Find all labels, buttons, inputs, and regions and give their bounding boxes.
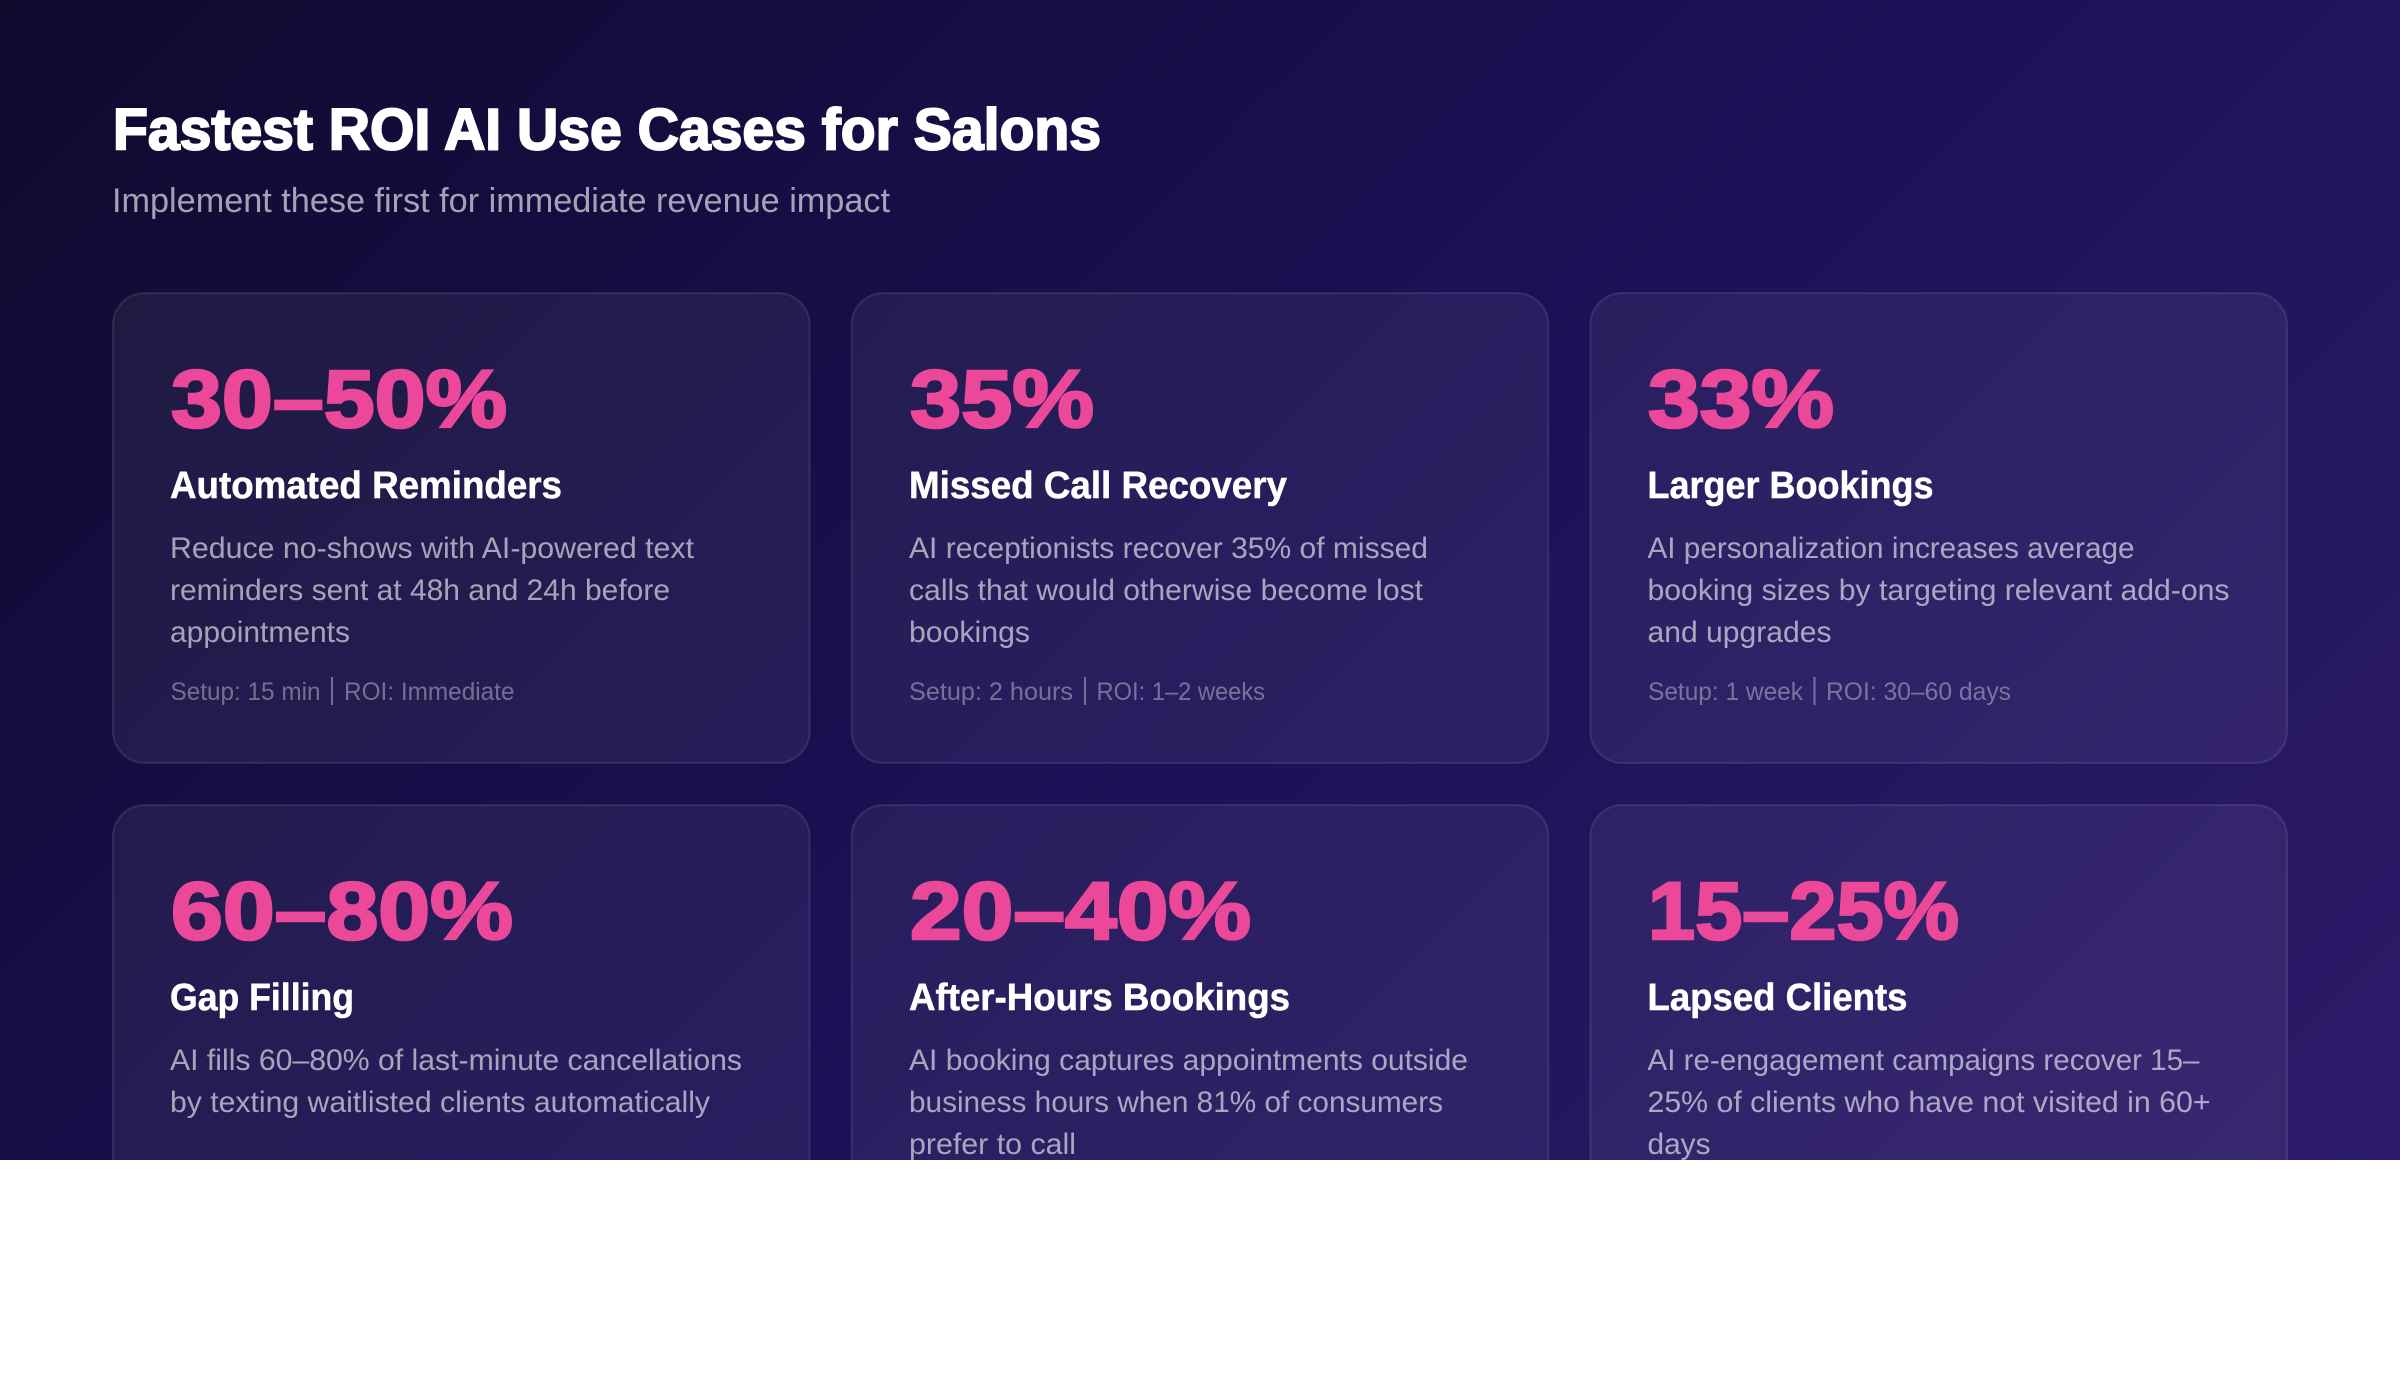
panel: automated reminders [113, 293, 810, 763]
stat: 15–25%: 15–25% [1648, 866, 1959, 957]
panel: after-hours bookings [852, 805, 1548, 1275]
description: calls that would otherwise become lost [909, 574, 1424, 607]
panel: missed call recovery [852, 293, 1548, 763]
stat: 35%: 35% [910, 354, 1094, 445]
description [909, 1044, 1468, 1161]
card heading: Gap Filling [170, 977, 354, 1019]
stat: 30–50%: 30–50% [171, 354, 507, 445]
description [1648, 532, 2230, 649]
card heading: Larger Bookings [1648, 465, 1934, 507]
description [909, 532, 1428, 649]
card heading: Lapsed Clients [1648, 977, 1908, 1019]
card heading: Missed Call Recovery [909, 465, 1287, 507]
card heading: After-Hours Bookings [909, 977, 1290, 1019]
setup and ROI [1648, 677, 2011, 706]
description: booking sizes by targeting relevant add-ons [1648, 574, 2230, 607]
setup and ROI [170, 677, 514, 706]
setup and ROI: ROI: Immediate [344, 678, 514, 706]
setup and ROI: Setup: 2 hours [909, 678, 1073, 706]
setup and ROI: Setup: 1 week [1648, 678, 1803, 706]
description: AI booking captures appointments outside [909, 1044, 1468, 1077]
description: AI personalization increases average [1648, 532, 2134, 565]
subtitle: Implement these first for immediate revenue impact [112, 182, 891, 220]
description: and upgrades [1648, 616, 1832, 649]
description: business hours when 81% of consumers [909, 1086, 1443, 1119]
panel: gap filling [113, 805, 810, 1275]
description: bookings [909, 616, 1030, 649]
description: appointments [170, 616, 350, 649]
description [170, 1044, 742, 1119]
title: Fastest ROI AI Use Cases for Salons [113, 98, 1101, 162]
setup and ROI: Setup: 15 min [170, 678, 320, 706]
description [170, 532, 695, 649]
card heading: Automated Reminders [170, 465, 562, 507]
description: AI receptionists recover 35% of missed [909, 532, 1428, 565]
description: AI fills 60–80% of last-minute cancellations [170, 1044, 742, 1077]
description: 25% of clients who have not visited in 60+ [1648, 1086, 2210, 1119]
description [1648, 1044, 2210, 1161]
panel: larger bookings [1590, 293, 2287, 763]
stat: 33%: 33% [1648, 354, 1834, 445]
description: AI re-engagement campaigns recover 15– [1648, 1044, 2200, 1077]
stat: 60–80%: 60–80% [171, 866, 513, 957]
setup and ROI [909, 677, 1265, 706]
panel: lapsed clients [1590, 805, 2287, 1275]
setup and ROI: ROI: 30–60 days [1826, 678, 2011, 706]
stat: 20–40%: 20–40% [910, 866, 1251, 957]
description: by texting waitlisted clients automatically [170, 1086, 710, 1119]
setup and ROI: ROI: 1–2 weeks [1096, 678, 1265, 706]
description: Reduce no-shows with AI-powered text [170, 532, 695, 565]
description: reminders sent at 48h and 24h before [170, 574, 670, 607]
